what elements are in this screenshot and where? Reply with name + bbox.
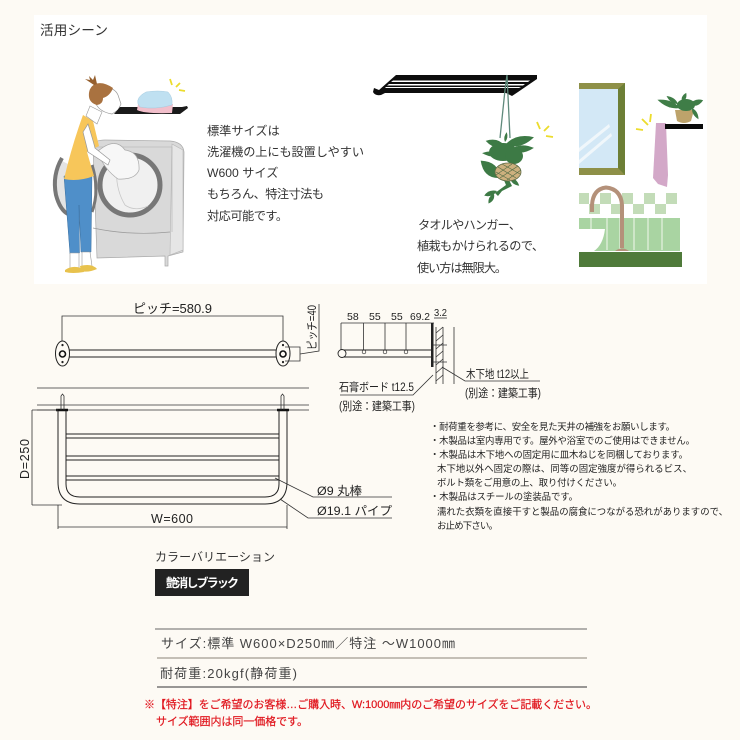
heading: color variation: カラーバリエーション xyxy=(155,550,275,564)
color swatch: matte black xyxy=(155,569,249,596)
illustration: washroom xyxy=(579,83,704,267)
diagram: side section: 3.2 xyxy=(434,307,447,319)
text: standard size note: もちろん、特注寸法も xyxy=(207,186,324,201)
text: use is limitless note: 使い方は無限大。 xyxy=(417,260,507,275)
spec table xyxy=(155,629,587,687)
spec: size: サイズ:標準 W600×D250㎜／特注 ～W1000㎜ xyxy=(161,636,455,651)
illustration: woman at washing machine xyxy=(55,75,184,273)
text block: cautions: ・木製品は木下地への固定用に皿木ねじを同梱しております。 xyxy=(430,449,688,460)
diagram: side section: 石膏ボード t12.5 xyxy=(339,380,414,394)
washing machine xyxy=(55,140,184,266)
text: standard size note: W600 サイズ xyxy=(207,165,278,180)
diagram: front view: W=600 xyxy=(151,512,193,526)
diagram: front view: Ø19.1 パイプ xyxy=(317,504,392,518)
text block: cautions: お止め下さい。 xyxy=(437,520,498,531)
laundry xyxy=(97,143,139,179)
diagram: side section: 69.2 xyxy=(410,311,430,323)
diagram: top view xyxy=(56,301,319,366)
shelf xyxy=(665,124,703,129)
tiles xyxy=(579,193,680,251)
color swatch: matte black: 艶消しブラック xyxy=(166,575,239,590)
towel xyxy=(653,123,668,187)
diagram: front view: D=250 xyxy=(18,439,32,479)
counter xyxy=(579,252,682,267)
text block: cautions: 濡れた衣類を直接干すと製品の腐食につながる恐れがありますので、 xyxy=(437,506,728,517)
panel: usage scenes xyxy=(34,15,707,284)
illustration: black rack xyxy=(373,75,537,96)
mirror xyxy=(579,83,625,175)
potted plant xyxy=(656,92,704,123)
text block: cautions: ・木製品はスチールの塗装品です。 xyxy=(430,491,578,502)
hair xyxy=(89,83,113,105)
text: standard size note: 洗濯機の上にも設置しやすい xyxy=(207,145,364,159)
red note: サイズ範囲内は同一価格です。 xyxy=(156,714,308,728)
text block: cautions: ボルト類をご用意の上、取り付けください。 xyxy=(437,477,622,488)
diagram: side section: (別途：建築工事) xyxy=(465,386,541,400)
heading: usage scenes: 活用シーン xyxy=(40,23,108,38)
text: standard size note: 標準サイズは xyxy=(207,123,280,138)
shirt xyxy=(64,115,99,180)
socks and slippers xyxy=(65,252,97,273)
text block: cautions: ・耐荷重を参考に、安全を見た天井の補強をお願いします。 xyxy=(430,421,675,432)
illustration: small shelf with towels xyxy=(114,79,188,114)
diagram: side section: 55 xyxy=(391,311,403,323)
sparkle xyxy=(636,114,651,130)
red note: ※【特注】をご希望のお客様…ご購入時、W:1000㎜内のご希望のサイズをご記載ください。 xyxy=(144,697,597,711)
text: use is limitless note: 植栽もかけられるので、 xyxy=(417,238,544,253)
diagram: top view: ピッチ=580.9 xyxy=(133,301,212,316)
arm xyxy=(83,124,110,165)
jeans xyxy=(64,174,92,254)
diagram: side section: 58 xyxy=(347,311,359,323)
text: use is limitless note: タオルやハンガー、 xyxy=(418,218,521,232)
spec: load: 耐荷重:20kgf(静荷重) xyxy=(160,666,297,681)
faucet xyxy=(592,188,622,248)
diagram: side section xyxy=(338,307,541,413)
text block: cautions xyxy=(430,421,728,531)
text: use is limitless note xyxy=(417,218,544,275)
diagram: front view: Ø9 丸棒 xyxy=(317,484,362,498)
diagram: side section: (別途：建築工事) xyxy=(339,399,415,413)
diagram: side section: 55 xyxy=(369,311,381,323)
diagram: front view xyxy=(18,388,392,529)
diagram: top view: ピッチ=40 xyxy=(306,305,319,350)
neck and head xyxy=(86,106,102,124)
text: standard size note: 対応可能です。 xyxy=(207,209,288,223)
text: standard size note xyxy=(207,123,364,223)
red note xyxy=(144,697,597,728)
text block: cautions: ・木製品は室内専用です。屋外や浴室でのご使用はできません。 xyxy=(430,435,695,446)
diagram: side section: 木下地 t12以上 xyxy=(466,368,529,381)
illustration: hanging plant xyxy=(477,75,553,205)
text block: cautions: 木下地以外へ固定の際は、同等の固定強度が得られるビス、 xyxy=(437,463,692,474)
